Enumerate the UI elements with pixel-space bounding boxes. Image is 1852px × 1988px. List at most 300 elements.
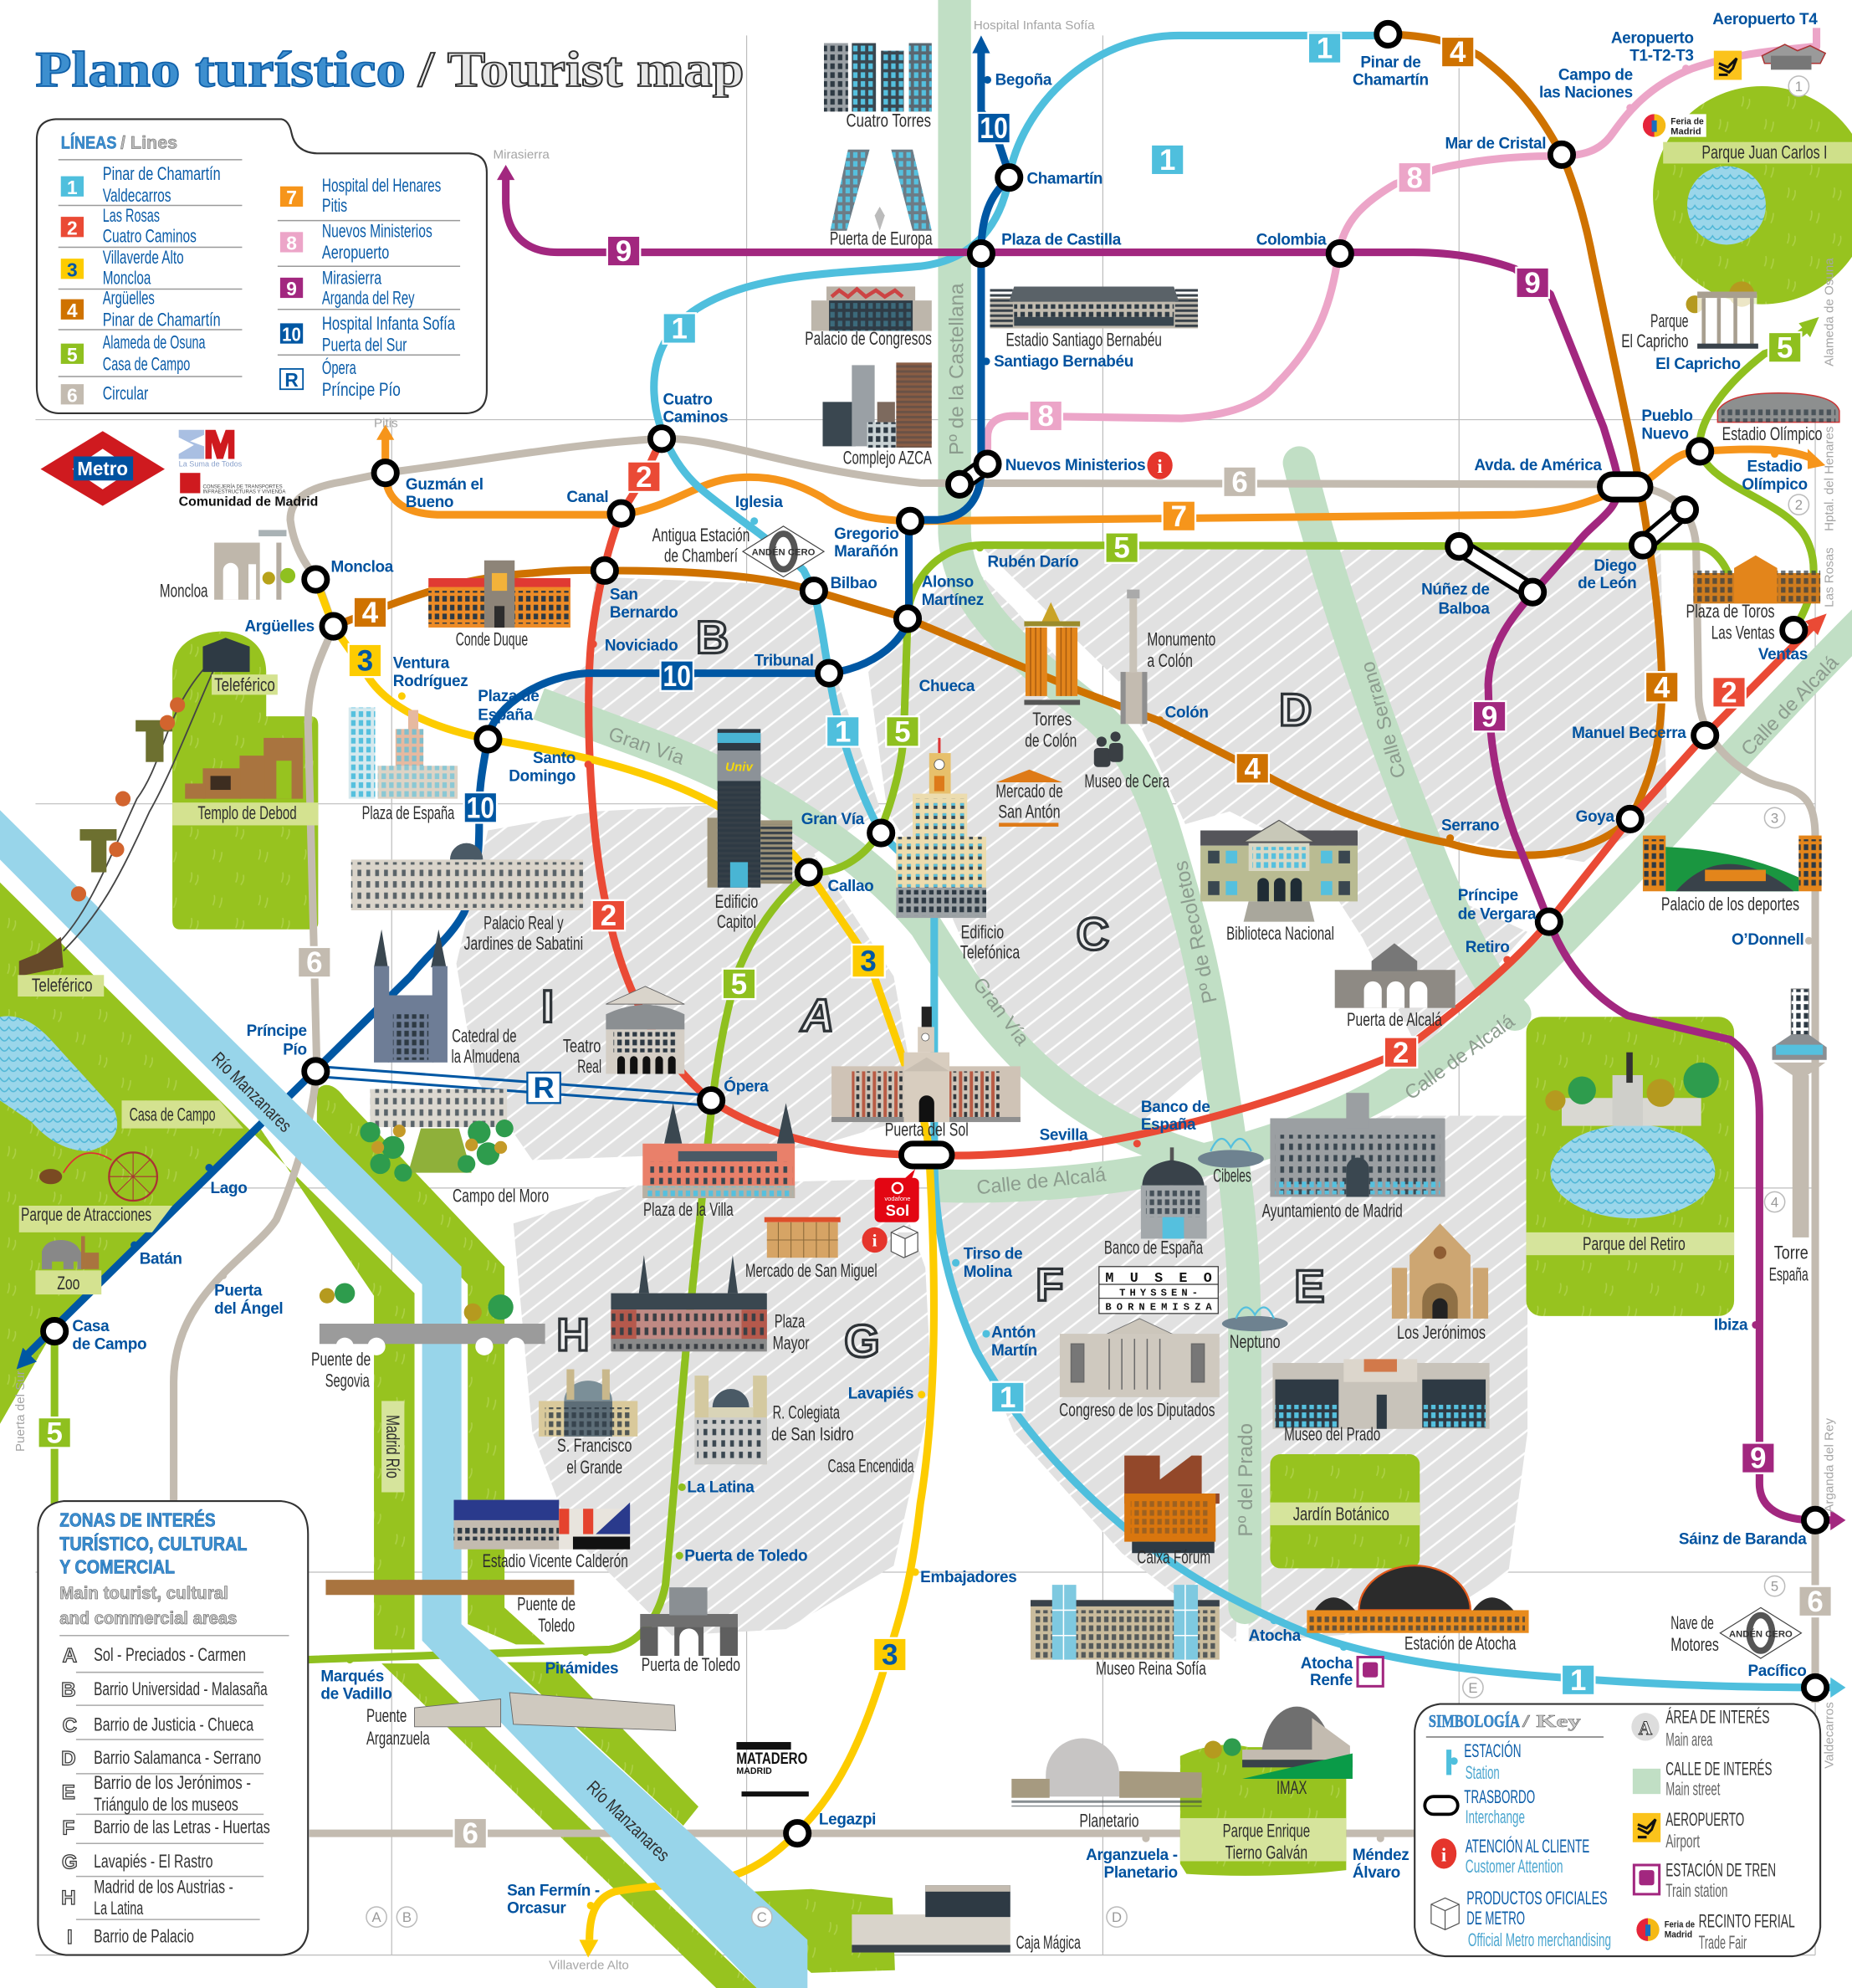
zone letters: E [1294, 1261, 1325, 1312]
station names: San Fermín - [507, 1882, 600, 1899]
park: Jardín Botánico: Jardín Botánico [1293, 1504, 1389, 1524]
panel: lines legend: 6 [67, 384, 78, 406]
landmark: Banco de España building: Banco de España [1104, 1237, 1204, 1258]
logo: Feria de Madrid: Feria de [1670, 117, 1704, 126]
line badges: 9 [616, 235, 632, 268]
panel: lines legend: 9 [286, 278, 297, 300]
landmark: Teleférico cables and towers [18, 638, 278, 997]
panel: zones of interest: G [62, 1852, 78, 1874]
panel: lines legend: LÍNEAS [61, 131, 116, 152]
landmark: Teleférico cables and towers: Teleférico [214, 674, 275, 695]
terminus labels: Las Rosas [1822, 547, 1836, 607]
line badges: 8 [1406, 161, 1423, 194]
river Manzanares: Río Manzanares [583, 1776, 674, 1866]
panel: key: ESTACIÓN [1464, 1740, 1521, 1761]
station names: Goya [1576, 808, 1614, 826]
station names: Guzmán el [406, 476, 483, 494]
landmark: Teatro Real: Real [577, 1056, 601, 1077]
panel: key: DE METRO [1466, 1908, 1525, 1929]
landmark: Planetario [1011, 1738, 1202, 1832]
station names: Alonso [922, 574, 974, 592]
terminus labels: Pitis [374, 417, 398, 431]
landmark: Museo del Prado [1272, 1359, 1490, 1444]
panel: zones of interest: H [61, 1887, 76, 1909]
street names: Pº de Recoletos [1169, 858, 1222, 1005]
landmark: Plaza de la Villa [642, 1103, 795, 1220]
station names: Rodríguez [393, 673, 468, 690]
landmark: Catedral de la Almudena: Catedral de [452, 1026, 517, 1047]
landmark: Estadio Olímpico [1717, 393, 1839, 444]
logo: Andén 0 Chamberí [652, 525, 824, 576]
panel: lines legend [37, 119, 487, 413]
landmark: Monumento a Colón: a Colón [1147, 650, 1193, 671]
landmark: Museo Reina Sofía: Museo Reina Sofía [1096, 1658, 1206, 1679]
station names: Ibiza [1714, 1317, 1748, 1335]
station names: Casa [72, 1318, 110, 1335]
station names: Santiago Bernabéu [994, 353, 1133, 371]
panel: lines legend: 7 [286, 187, 297, 208]
panel: lines legend: Pitis [322, 195, 347, 216]
station names: Bernardo [610, 604, 678, 622]
station names: Aeropuerto T4 [1712, 11, 1818, 28]
station names: Estadio [1747, 459, 1803, 476]
line badges: 6 [1807, 1586, 1824, 1618]
landmark: Parque Tierno Galván: Tierno Galván [1225, 1842, 1307, 1862]
station names: Plaza de Castilla [1001, 231, 1122, 248]
landmark: Torres de Colón: Torres [1032, 709, 1072, 730]
line badges: 5 [894, 715, 911, 748]
station names: Cuatro [663, 391, 713, 408]
station names: Lago [211, 1180, 247, 1197]
landmark: Conde Duque: Conde Duque [456, 628, 528, 649]
panel: lines legend: Valdecarros [103, 185, 171, 206]
landmark: Complejo AZCA [822, 362, 932, 469]
panel: lines legend: 2 [67, 217, 78, 238]
landmark: Puente de Segovia: Puente de [311, 1349, 371, 1370]
street names [606, 283, 1843, 1537]
panel: lines legend: Nuevos Ministerios [322, 220, 432, 241]
panel: lines legend: Mirasierra [322, 267, 382, 288]
station names: Campo de [1558, 66, 1633, 84]
station names: Balboa [1438, 600, 1490, 617]
station names: Príncipe [247, 1022, 307, 1040]
landmark: Puerta de Europa: Puerta de Europa [830, 228, 933, 248]
panel: lines legend: 1 [67, 177, 78, 198]
panel: key: / Key [1522, 1711, 1581, 1731]
grid references: 2 [1795, 497, 1803, 513]
landmark: Neptuno: Neptuno [1230, 1331, 1281, 1352]
logo: Matadero Madrid: MADRID [736, 1766, 772, 1776]
zone letters: B [696, 612, 729, 663]
landmark: Complejo AZCA: Complejo AZCA [843, 448, 932, 469]
landmark: Torres de Colón: de Colón [1025, 730, 1077, 751]
logo: Museo Thyssen-Bornemisza: MUSEO [1105, 1271, 1212, 1287]
landmark: Caja Mágica [852, 1885, 1081, 1953]
logo: Museo Thyssen-Bornemisza [1099, 1267, 1218, 1314]
logo: Museo Thyssen-Bornemisza: BORNEMISZA [1105, 1301, 1212, 1313]
panel: key: SIMBOLOGÍA [1429, 1711, 1520, 1731]
metro line 4 [334, 34, 1662, 855]
station names: Colón [1165, 705, 1209, 722]
landmark: Plaza Mayor [611, 1255, 810, 1353]
logo: Empresa Madrid: La Suma de Todos [179, 460, 243, 469]
station names: El Capricho [1655, 356, 1741, 373]
station names: Retiro [1466, 939, 1510, 956]
icon: info Nuevos Ministerios: i [1157, 456, 1163, 477]
logo: Metro [40, 431, 165, 506]
landmark: Torre España [1769, 989, 1827, 1284]
line badges: 4 [362, 597, 379, 629]
line badges: 1 [1570, 1664, 1586, 1697]
landmark: Mercado de San Miguel: Mercado de San Miguel [745, 1260, 877, 1281]
station names: Tribunal [755, 653, 814, 670]
Madrid Río label [381, 1401, 404, 1493]
line badges: 8 [1038, 400, 1054, 433]
panel: key: Customer Attention [1466, 1856, 1563, 1877]
line badges: 2 [1721, 676, 1737, 709]
landmark: Mercado de San Antón [995, 770, 1063, 827]
panel: zones of interest: Lavapiés - El Rastro [94, 1851, 213, 1872]
line badges: 5 [1777, 331, 1793, 364]
line badges: 2 [1393, 1037, 1409, 1069]
logo: Feria de Madrid: Madrid [1670, 127, 1701, 137]
landmark: Puente de Arganzuela: Puente [366, 1705, 407, 1726]
landmark: Torre España: España [1769, 1263, 1809, 1284]
station names: España [1141, 1116, 1196, 1134]
station names: de León [1578, 575, 1636, 592]
scribbled zones of interest [457, 546, 1667, 1642]
zone letters: A [800, 990, 834, 1041]
station names: Pinar de [1360, 54, 1420, 71]
landmark: IMAX [1205, 1707, 1353, 1798]
landmark: Parque El Capricho [1621, 281, 1758, 351]
logo: Comunidad de Madrid: Comunidad de Madrid [179, 495, 318, 510]
landmark: Puente de Arganzuela [366, 1693, 676, 1749]
landmark: San Francisco el Grande: S. Francisco [557, 1435, 632, 1456]
panel: lines legend: Moncloa [103, 267, 151, 288]
panel: zones of interest: Sol - Preciados - Carmen [94, 1644, 246, 1665]
panel: lines legend: R [284, 369, 299, 391]
panel: lines legend: Hospital Infanta Sofía [322, 313, 456, 334]
station names: Chueca [919, 678, 975, 695]
landmark: IMAX: IMAX [1276, 1777, 1307, 1798]
street names: Pº del Prado [1235, 1423, 1257, 1537]
panel: zones of interest: Barrio de Justicia - Chueca [94, 1714, 254, 1734]
line badges: 7 [1171, 500, 1187, 533]
station names: Begoña [995, 72, 1052, 90]
landmark: San Francisco el Grande: el Grande [566, 1457, 622, 1478]
line badges: 2 [601, 899, 616, 932]
landmark: Zoo: Zoo [57, 1273, 79, 1294]
station names: Gran Vía [801, 811, 865, 828]
panel: key: Main street [1665, 1779, 1720, 1800]
line badges: 6 [1231, 466, 1248, 499]
panel: zones of interest: Madrid de los Austrias - [94, 1876, 233, 1897]
station names: Batán [140, 1251, 182, 1268]
landmark: Conde Duque [428, 561, 570, 649]
street names: Gran Vía [606, 723, 688, 769]
landmark: Palacio de los Deportes [1643, 836, 1822, 915]
station names: Caminos [663, 409, 728, 427]
panel: lines legend: Príncipe Pío [322, 379, 401, 400]
icon: customer attention and shop: i [872, 1231, 877, 1251]
station names: T1-T2-T3 [1629, 48, 1694, 65]
station names: Ventura [393, 655, 450, 673]
landmark: Puerta del Sol, Real Casa de Correos: Puerta del Sol [885, 1120, 969, 1140]
station names: Ventas [1758, 646, 1808, 664]
panel: key: RECINTO FERIAL [1699, 1910, 1795, 1931]
logo: Vodafone Sol: Sol [886, 1202, 909, 1219]
panel: zones of interest: TURÍSTICO, CULTURAL [59, 1533, 248, 1555]
panel: zones of interest: A [63, 1645, 77, 1668]
station names: Aeropuerto [1611, 30, 1694, 48]
metro line 3 [315, 579, 934, 1939]
metro line R [315, 1066, 711, 1105]
terminus labels: Mirasierra [493, 147, 550, 161]
panel: key: ESTACIÓN DE TREN [1665, 1860, 1776, 1881]
logo: Andén 0 Nave de Motores: Nave de [1670, 1612, 1714, 1633]
panel: zones of interest [38, 1501, 308, 1955]
metro line 6 [174, 438, 1815, 1833]
line badges: 10 [467, 792, 494, 824]
landmark: Palacio de Congresos [805, 286, 932, 349]
station names: Argüelles [244, 618, 315, 636]
station names: Callao [828, 878, 873, 895]
station names: Bueno [406, 494, 453, 511]
terminus labels: Alameda de Osuna [1822, 258, 1836, 366]
street names: Calle de Alcalá [975, 1163, 1108, 1198]
landmark: Puerta de Europa [830, 150, 933, 248]
landmark: Catedral de la Almudena [374, 930, 520, 1067]
landmark: Monumento a Colón: Monumento [1147, 628, 1215, 649]
station names: Tirso de [964, 1246, 1022, 1263]
landmark: Torre España: Torre [1774, 1242, 1809, 1263]
panel: zones of interest: B [61, 1678, 76, 1701]
landmark: Estación de Atocha: Estación de Atocha [1404, 1632, 1517, 1653]
station names: Puerta [214, 1283, 263, 1300]
panel: zones of interest: I [67, 1926, 73, 1949]
line badges: 10 [980, 112, 1008, 145]
logo: Vodafone Sol: vodafone [884, 1195, 910, 1202]
landmark: Caixa Fórum [1124, 1456, 1220, 1567]
station names: Marqués [320, 1668, 384, 1685]
logo: Comunidad de Madrid [179, 473, 318, 510]
logo: Comunidad de Madrid: CONSEJERÍA DE TRANSPORTES [202, 484, 283, 489]
landmark: Parque Tierno Galván: Parque Enrique [1223, 1821, 1310, 1842]
landmark: Ayuntamiento de Madrid [1262, 1093, 1445, 1222]
grid references: 5 [1771, 1579, 1778, 1595]
street names: Gran Vía [969, 973, 1034, 1050]
line badges: 1 [672, 313, 688, 346]
landmark: Estadio Santiago Bernabéu: Estadio Santiago Bernabéu [1005, 330, 1162, 351]
station names: Plaza de [478, 688, 539, 705]
panel: lines legend: Cuatro Caminos [103, 225, 197, 246]
station names: Puerta de Toledo [684, 1547, 807, 1565]
landmark: Cibeles: Cibeles [1213, 1165, 1251, 1186]
landmark: Puerta de Toledo [640, 1587, 740, 1675]
panel: lines legend: 10 [282, 324, 301, 346]
landmark: Moncloa arch [160, 530, 295, 602]
station names: Bilbao [831, 575, 877, 592]
landmark: Templo de Debod: Templo de Debod [197, 802, 297, 823]
landmark: Parque Tierno Galván [1180, 1745, 1346, 1876]
landmark: Teleférico cables and towers: Teleférico [32, 975, 93, 996]
station names: Nuevo [1641, 425, 1689, 443]
terminus labels: Valdecarros [1822, 1702, 1836, 1769]
station names: Sevilla [1040, 1126, 1088, 1144]
street names: Calle de Alcalá [1400, 1009, 1519, 1104]
park: Casa de Campo and Madrid Río west bank [0, 883, 415, 1649]
panel: key: Airport [1665, 1831, 1700, 1852]
landmark: Biblioteca Nacional [1200, 820, 1358, 944]
logo: Feria de Madrid [1643, 114, 1706, 137]
panel: lines legend: Pinar de Chamartín [103, 309, 221, 330]
landmark: Palacio de Congresos: Palacio de Congresos [805, 328, 932, 349]
panel: key: A [1639, 1718, 1653, 1739]
landmark: Airport T4 [1762, 44, 1825, 69]
metro line 10 [25, 51, 1010, 1356]
logo: Empresa Madrid [179, 430, 243, 469]
station names: Núñez de [1421, 582, 1490, 599]
metro line 1 [654, 35, 1835, 1688]
line badges: 5 [1113, 532, 1130, 565]
panel: key: TRASBORDO [1464, 1786, 1535, 1807]
landmark: Congreso de los Diputados: Congreso de los Diputados [1059, 1400, 1215, 1421]
landmark: Puente de Segovia: Segovia [325, 1371, 370, 1391]
street names: Pº de la Castellana [946, 283, 969, 455]
landmark: Caixa Fórum: Caixa Fórum [1137, 1546, 1210, 1567]
panel: zones of interest: Barrio de los Jerónimos - [94, 1772, 251, 1793]
station names: San [610, 587, 638, 604]
landmark: Plaza de la Villa: Plaza de la Villa [643, 1199, 734, 1220]
landmark: Estadio Santiago Bernabéu [990, 286, 1198, 351]
panel: lines legend: Arganda del Rey [322, 288, 415, 309]
landmark: Edificio Capitol: Edificio [715, 891, 758, 912]
station names: Banco de [1141, 1099, 1210, 1116]
landmark: Neptuno [1222, 1308, 1288, 1352]
metro line 2 [589, 438, 1815, 1155]
panel: key: i [1441, 1844, 1446, 1865]
panel: key: PRODUCTOS OFICIALES [1466, 1888, 1608, 1909]
panel: zones of interest: ZONAS DE INTERÉS [59, 1509, 216, 1530]
landmark: Moncloa arch: Moncloa [160, 581, 208, 602]
icon: customer attention and shop [862, 1226, 918, 1258]
station names: Pío [283, 1042, 307, 1059]
station names: Canal [566, 489, 608, 506]
metro line 5 [54, 325, 1814, 1660]
panel: lines legend: Villaverde Alto [103, 247, 184, 268]
panel: key: Station [1466, 1762, 1500, 1783]
park: Campo del Moro and Madrid Río east bank [317, 1085, 545, 1644]
zone letters: I [541, 981, 554, 1032]
panel: lines legend: 3 [67, 259, 78, 280]
terminus labels: Hospital Infanta Sofía [974, 18, 1095, 33]
line badges: 1 [835, 715, 851, 748]
panel: lines legend: 8 [286, 233, 297, 254]
panel: key: Official Metro merchandising [1468, 1929, 1611, 1950]
panel: lines legend: Ópera [322, 357, 356, 378]
panel: lines legend: Circular [103, 382, 148, 403]
lake: Casa de Campo [0, 1016, 117, 1151]
landmark: R. Colegiata de San Isidro: R. Colegiata [773, 1402, 840, 1423]
street names: Calle de Alcalá [1737, 651, 1843, 760]
landmark: Torres de Colón [1024, 602, 1080, 751]
landmark: Planetario: Planetario [1079, 1811, 1139, 1832]
main streets [539, 0, 1852, 1607]
landmark: Monumento a Colón [1121, 590, 1215, 724]
station names: Noviciado [605, 637, 678, 654]
station names: de Campo [72, 1335, 146, 1353]
station names: O’Donnell [1732, 931, 1803, 949]
station names: La Latina [687, 1479, 755, 1497]
landmark: Museo del Prado: Museo del Prado [1284, 1423, 1380, 1444]
landmark: Biblioteca Nacional: Biblioteca Nacional [1226, 923, 1334, 944]
landmark: Edificio Capitol: Capitol [717, 911, 756, 932]
logo: Andén 0 Chamberí: ANDÉN CERO [752, 547, 816, 558]
icon: airport [1714, 51, 1742, 79]
line badges: 2 [636, 461, 652, 494]
landmark: Puerta de Alcalá [1335, 943, 1456, 1030]
line badges: 9 [1481, 700, 1497, 733]
river Manzanares [0, 810, 807, 1988]
line badges: 1 [1159, 144, 1175, 177]
line badges: 6 [463, 1817, 478, 1850]
station names: las Naciones [1539, 85, 1633, 102]
grid references: D [1112, 1909, 1122, 1925]
zone letters: G [844, 1315, 880, 1366]
panel: zones of interest: Triángulo de los museos [94, 1794, 238, 1815]
panel: zones of interest: Barrio de las Letras - Huertas [94, 1816, 270, 1837]
panel: zones of interest: Barrio Salamanca - Serrano [94, 1747, 261, 1768]
landmark: Edificio Telefónica: Edificio [961, 921, 1004, 942]
landmark: Banco de España building [1104, 1147, 1207, 1258]
line badges: 3 [357, 645, 373, 678]
logo: Metro: Metro [77, 458, 128, 479]
station names: del Ángel [214, 1299, 283, 1318]
logo: Matadero Madrid: MATADERO [736, 1750, 807, 1768]
landmark: Edificio Telefónica [896, 738, 1021, 963]
landmark: Estación de Atocha [1307, 1565, 1529, 1653]
interchange connectors [901, 464, 1685, 1166]
logo: Matadero Madrid [736, 1742, 809, 1796]
terminus labels: Arganda del Rey [1822, 1418, 1836, 1513]
grid references: 1 [1795, 79, 1803, 95]
line badges: 9 [1750, 1442, 1767, 1475]
park: Madrid Río south east bank [507, 1663, 698, 1826]
panel: key: Trade Fair [1699, 1932, 1747, 1953]
park: Madrid Río lower west bank [381, 1663, 757, 1988]
station names: Sáinz de Baranda [1679, 1531, 1807, 1549]
landmark: Plaza de España: Plaza de España [362, 802, 455, 823]
icon: info Nuevos Ministerios [1147, 451, 1173, 479]
station names: Renfe [1310, 1672, 1353, 1689]
title: / Tourist map [417, 42, 744, 98]
metro line 8 [987, 28, 1817, 465]
landmark: Parque de Atracciones [19, 1152, 172, 1232]
panel: zones of interest: C [63, 1714, 77, 1737]
line badges: 3 [860, 945, 877, 978]
station names: Marañón [834, 543, 898, 561]
Madrid Río label: Madrid Río [382, 1415, 403, 1478]
landmark: Plaza de Toros Las Ventas [1686, 556, 1820, 643]
landmark: Ayuntamiento de Madrid: Ayuntamiento de Madrid [1262, 1201, 1403, 1222]
line badges: 4 [1450, 36, 1466, 69]
grid references: E [1468, 1680, 1477, 1696]
station names: Olímpico [1742, 476, 1808, 494]
panel: key: Madrid [1665, 1929, 1692, 1939]
station names: Mar de Cristal [1445, 135, 1546, 152]
park: Retiro [1527, 1017, 1734, 1316]
